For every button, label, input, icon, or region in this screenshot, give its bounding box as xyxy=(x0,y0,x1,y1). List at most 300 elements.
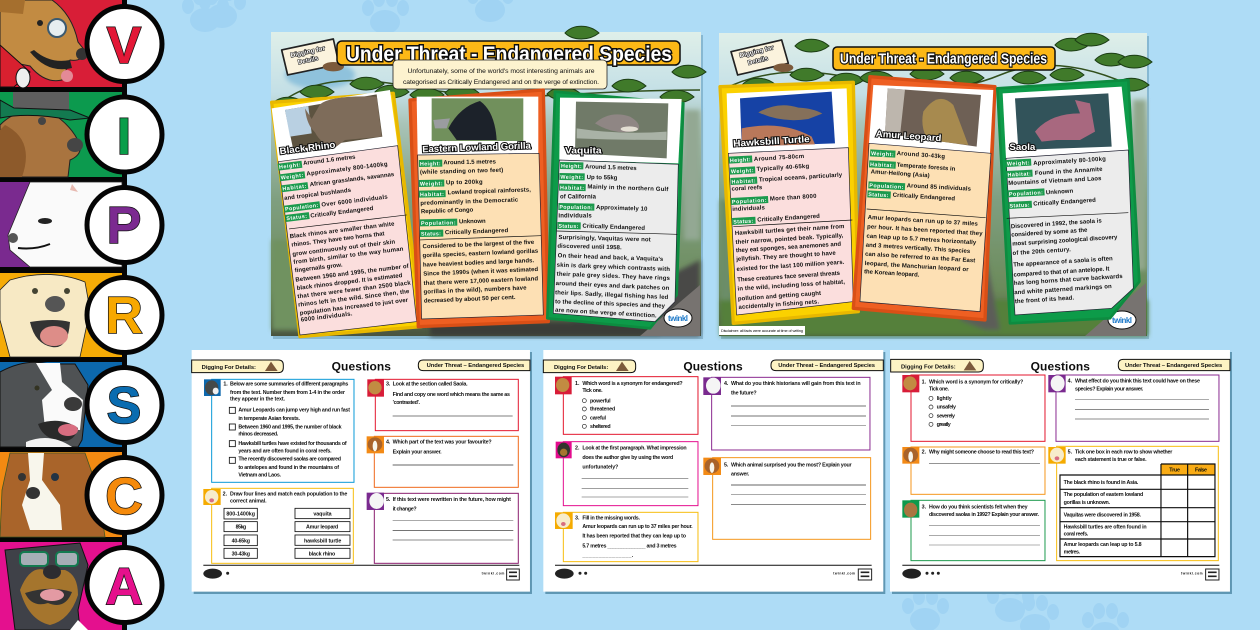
letter circle C xyxy=(87,458,162,532)
icon: airedale xyxy=(367,379,384,397)
question 4: 4. xyxy=(1068,378,1073,384)
worksheet 3 xyxy=(890,350,1232,594)
facts: saola: Habitat: xyxy=(1007,171,1031,179)
question 3: Fill in the missing words. xyxy=(582,515,641,521)
facts: rhino: Around 1.6 metres xyxy=(303,155,356,167)
question 1: years and are often found in coral reefs. xyxy=(238,448,332,454)
question 3: discovered saolas in 1992? Explain your answer. xyxy=(929,512,1040,518)
title banner xyxy=(833,47,1055,70)
paragraph: gorilla: that there were 17,000 eastern lowland xyxy=(423,276,539,287)
letter circle S: S xyxy=(107,377,141,435)
question 3 xyxy=(902,500,1045,561)
letter circle S xyxy=(87,368,162,442)
intro text box: Unfortunately, some of the world's most interesting animals are xyxy=(408,68,595,75)
VIPRSCA dog strip xyxy=(0,0,162,630)
paragraph: saola: compared to that of an antelope. It xyxy=(1013,266,1110,279)
question 2: 2. xyxy=(922,449,927,455)
paragraph: leopard: can also be referred to as the Far East xyxy=(865,252,975,264)
question 1: Amur Leopards can jump very high and run fast xyxy=(238,408,350,414)
question 5: true or false table: coral reefs. xyxy=(1064,532,1089,538)
question 3: 5.7 metres ______________ and 3 metres xyxy=(582,543,677,549)
facts: vaquita: Approximately 10 xyxy=(596,205,648,213)
panel: S blue dog xyxy=(0,362,122,447)
facts: gorilla: Unknown xyxy=(459,219,486,225)
question 5: true or false table: False xyxy=(1195,468,1207,474)
facts: turtle: Around 75-80cm xyxy=(754,154,804,163)
question 2: hawksbill turtle xyxy=(304,538,341,544)
facts: gorilla: Status: xyxy=(421,231,441,238)
badge: Digging for Details: Details xyxy=(297,55,319,66)
question 1: unsafely xyxy=(937,405,956,411)
question 4: Explain your answer. xyxy=(393,449,442,455)
card: Vaquita: Vaquita xyxy=(565,145,603,155)
card: Eastern Lowland Gorilla: Eastern Lowland Gorilla xyxy=(422,141,532,154)
facts: saola: Found in the Annamite xyxy=(1035,167,1103,177)
paragraph: vaquita: skin is dark grey which contrasts with xyxy=(557,263,670,273)
vines and leaves xyxy=(272,26,706,110)
facts: gorilla: Around 1.5 metres xyxy=(443,159,497,166)
worksheet 1 xyxy=(192,350,532,594)
question 1 xyxy=(902,375,1045,441)
facts: gorilla: predominantly in the Democratic xyxy=(420,198,519,207)
paragraph: vaquita: their lips. Sadly, illegal fishing has led xyxy=(555,290,669,301)
card: Hawksbill Turtle xyxy=(720,82,858,323)
question 2 xyxy=(556,442,698,506)
paragraph: saola xyxy=(1011,218,1124,305)
facts: gorilla: Population: xyxy=(421,220,456,227)
facts: gorilla xyxy=(419,159,541,240)
poster: left, black rhino, gorilla, vaquita xyxy=(271,26,706,339)
facts: leopard: Habitat: xyxy=(870,162,894,169)
facts: rhino: African grasslands, savannas xyxy=(310,172,395,188)
question 3 xyxy=(555,512,698,562)
card: Saola xyxy=(997,80,1139,323)
card: Saola: Saola xyxy=(1009,142,1036,152)
facts: leopard: Critically Endangered xyxy=(893,193,955,202)
paragraph: rhino: from birth, similar to the way human xyxy=(293,246,404,266)
panel: A pink dog xyxy=(0,542,122,630)
facts: leopard: Around 85 individuals xyxy=(907,183,972,193)
photo: rhino xyxy=(285,94,382,150)
copyright strip xyxy=(719,326,805,335)
facts: gorilla: Republic of Congo xyxy=(421,207,474,215)
paragraph: saola: Discovered in 1992, the saola is xyxy=(1011,218,1103,230)
question 1: from the text. Number them from 1-4 in the order xyxy=(230,390,345,396)
header tab xyxy=(192,360,283,373)
topic tab: Under Threat – Endangered Species xyxy=(778,363,875,369)
paragraph: vaquita: around their eyes and dark patches on xyxy=(556,281,670,292)
photo: gorilla xyxy=(432,98,523,141)
question 5: true or false table: Hawksbill turtles are often found in xyxy=(1064,524,1147,530)
paragraph: vaquita: discovered until 1958. xyxy=(557,244,622,251)
facts: rhino: Population: xyxy=(285,203,319,213)
header tab xyxy=(891,359,983,372)
letter circle A xyxy=(87,548,162,622)
question 1: 1. xyxy=(223,382,228,388)
panel: R yellow dog xyxy=(0,273,122,357)
paragraph: gorilla: have heaviest bodies and large hands. xyxy=(423,258,535,269)
facts: turtle: Critically Endangered xyxy=(757,214,820,224)
badge: Digging for Details xyxy=(282,39,344,75)
copyright strip: Disclaimer: all facts were accurate at time of writing xyxy=(721,328,803,333)
photo: vaquita xyxy=(575,102,668,158)
paragraph: rhino: Between 1960 and 1995, the number of xyxy=(295,264,409,284)
question 1 xyxy=(204,379,354,482)
paragraph: leopard: can leap up to 5.7 metres horizontally xyxy=(866,234,977,246)
paragraph: saola: The appearance of a saola is often xyxy=(1013,256,1113,269)
question 2: Look at the first paragraph. What impression xyxy=(582,445,687,451)
question 1: Hawksbill turtles have existed for thousands of xyxy=(238,441,347,447)
facts: saola xyxy=(1006,157,1128,218)
paragraph: rhino: grow continuously out of their skin xyxy=(292,239,396,258)
facts: leopard: Amur-Heilong (Asia) xyxy=(871,169,930,179)
card: Black Rhino xyxy=(272,90,422,337)
letter circle V xyxy=(87,6,162,82)
worksheet 2 xyxy=(543,350,885,594)
grey corner and twinkl logo: twinkl xyxy=(668,314,688,323)
facts: turtle: More than 8000 xyxy=(770,194,817,203)
badge: Digging for Details: Digging for xyxy=(290,45,326,59)
question 3 xyxy=(367,379,518,431)
question 5: 5. xyxy=(724,463,729,469)
paragraph: leopard: per hour. It has been reported that they xyxy=(867,224,983,237)
question 3: 3. xyxy=(386,382,391,388)
facts: gorilla: Critically Endangered xyxy=(445,228,509,236)
facts: rhino: Habitat: xyxy=(282,184,307,193)
paragraph: gorilla xyxy=(422,240,539,305)
letter circle C: C xyxy=(105,468,143,526)
paragraph: turtle: accidentally in fishing nets. xyxy=(738,299,820,311)
question 1: Tick one. xyxy=(582,388,603,394)
paragraph: gorilla: decreased by about 50 per cent. xyxy=(424,295,516,305)
facts: turtle: Typically 40-65kg xyxy=(756,164,810,173)
question 5: answer. xyxy=(731,471,750,477)
facts: vaquita: individuals xyxy=(558,214,592,220)
facts: leopard xyxy=(867,149,986,218)
panel: I green dog xyxy=(0,92,122,177)
question 1: threatened xyxy=(590,407,615,413)
question 2: 30-43kg xyxy=(232,551,250,557)
icon: retriever xyxy=(1048,447,1066,464)
grey corner and twinkl logo: twinkl xyxy=(1112,316,1132,325)
question 4: the future? xyxy=(731,391,757,397)
question 5: true or false table: Tick one box in each row to show whether xyxy=(1075,449,1172,455)
paragraph: leopard: and 3 metres vertically. This species xyxy=(866,243,971,255)
question 2: does the author give by using the word xyxy=(582,455,673,461)
question 1: 1. xyxy=(575,381,580,387)
paragraph: gorilla: gorilla species, eastern lowland gorillas xyxy=(422,249,539,259)
question 1: to antelopes and found in the mountains of xyxy=(238,465,339,471)
facts: vaquita: Height: xyxy=(561,164,582,170)
paragraph: gorilla: gorillas in the wild), numbers have xyxy=(423,285,527,296)
icon: collie xyxy=(204,379,221,396)
facts: vaquita: Habitat: xyxy=(560,185,584,192)
paragraph: turtle: in the wild, including loss of habitat, xyxy=(737,279,846,293)
icon: white dog xyxy=(1048,375,1066,392)
question 2: Draw four lines and match each population to the xyxy=(230,492,347,498)
paragraph: leopard: leopard, the Manchurian leopard or xyxy=(865,261,969,273)
facts: vaquita: Weight: xyxy=(560,175,583,181)
facts: saola: Unknown xyxy=(1046,189,1074,196)
paragraph: saola: considered by some as the xyxy=(1011,228,1088,239)
vines and leaves xyxy=(720,33,1152,98)
question 5: true or false table: Amur leopards can leap up to 5.8 xyxy=(1064,542,1142,548)
photo: turtle xyxy=(740,92,835,147)
facts: rhino: Status: xyxy=(286,214,308,222)
topic tab: Under Threat – Endangered Species xyxy=(427,363,524,369)
facts: turtle: Population: xyxy=(732,198,767,206)
question 2: 2. xyxy=(575,445,580,451)
question 1: sheltered xyxy=(590,424,611,430)
paragraph: turtle xyxy=(735,224,846,311)
facts: rhino: Approximately 800-1400kg xyxy=(306,162,388,178)
title banner: Under Threat - Endangered Species xyxy=(346,43,672,66)
question 5: true or false table xyxy=(1048,446,1218,561)
question 4: What effect do you think this text could have on these xyxy=(1075,378,1200,384)
question 2: 85kg xyxy=(236,525,246,531)
question 1: 1. xyxy=(922,379,927,385)
question 5: true or false table: gorillas is unknown. xyxy=(1064,500,1110,506)
facts: vaquita xyxy=(557,162,677,234)
question 5: true or false table: metres. xyxy=(1064,549,1080,555)
question 4 xyxy=(367,436,518,487)
facts: leopard: Status: xyxy=(868,192,889,199)
question 5 xyxy=(367,493,518,563)
paragraph: vaquita: Surprisingly, Vaquitas were not xyxy=(558,235,651,243)
paragraph: leopard: the Korean leopard. xyxy=(864,269,920,279)
topic tab xyxy=(771,360,883,371)
question 4 xyxy=(1048,375,1219,441)
question 5: true or false table: True xyxy=(1169,468,1180,474)
facts: vaquita: Status: xyxy=(558,224,579,230)
question 4: What do you think historians will gain from this text in xyxy=(731,381,861,387)
question 2: unfortunately? xyxy=(582,465,618,471)
question 1 xyxy=(555,377,698,434)
heading: Questions xyxy=(1031,359,1090,373)
letter circle I: I xyxy=(117,108,131,166)
question 3: _______________. xyxy=(581,553,634,559)
question 3: 3. xyxy=(575,515,580,521)
paragraph: saola: most surprising zoological discovery xyxy=(1012,235,1118,248)
question 1: greatly xyxy=(937,422,951,428)
facts: gorilla: Up to 200kg xyxy=(446,180,483,186)
facts: vaquita: Population: xyxy=(559,205,593,211)
question 3: 'contrasted'. xyxy=(393,400,420,406)
paragraph: gorilla: Considered to be the largest of the five xyxy=(422,240,535,250)
facts: saola: Mountains of Vietnam and Laos xyxy=(1008,176,1102,187)
icon: airedale xyxy=(555,377,572,394)
question 4: 4. xyxy=(724,381,729,387)
card: Amur Leopard: Amur Leopard xyxy=(876,129,942,143)
footer xyxy=(555,565,872,580)
facts: vaquita: Up to 55kg xyxy=(587,175,618,182)
question 1: Which word is a synonym for critically? xyxy=(929,379,1023,385)
paragraph: vaquita xyxy=(555,235,671,320)
facts: gorilla: Habitat: xyxy=(420,192,444,198)
icon: spaniel xyxy=(703,458,721,475)
question 1: severely xyxy=(937,413,955,419)
icon: spaniel xyxy=(902,447,919,464)
card: Vaquita xyxy=(547,92,683,328)
facts: leopard: Weight: xyxy=(871,151,894,158)
paragraph: rhino: that there were fewer than 2500 black xyxy=(297,280,412,300)
grey corner and twinkl logo xyxy=(640,285,700,336)
question 3: Find and copy one word which means the same as xyxy=(393,392,510,398)
question 1: lightly xyxy=(937,396,952,402)
paragraph: turtle: Hawksbill turtles get their name from xyxy=(735,224,845,237)
paragraph: vaquita: to the decline of this species and they xyxy=(555,299,666,310)
header tab: Digging For Details: xyxy=(202,365,256,371)
question 1: The recently discovered saolas are compared xyxy=(238,457,341,463)
paragraph: saola: and white patterned markings on xyxy=(1014,284,1112,296)
paragraph: turtle: jellyfish. They are thought to have xyxy=(735,251,837,263)
question 1: Between 1960 and 1995, the number of black xyxy=(238,424,342,430)
title banner: Under Threat - Endangered Species xyxy=(840,52,1047,68)
photo: leopard xyxy=(885,88,981,147)
question 2: 2. xyxy=(223,492,228,498)
card: Black Rhino: Black Rhino xyxy=(279,140,336,156)
question 1: Below are some summaries of different paragraphs xyxy=(230,382,348,388)
letter circle A: A xyxy=(105,558,143,616)
panel: C orange dog xyxy=(0,452,122,537)
letter circle P xyxy=(87,188,162,262)
topic tab xyxy=(418,360,530,371)
question 5: true or false table: The population of eastern lowland xyxy=(1064,492,1143,498)
question 4: species? Explain your answer. xyxy=(1075,386,1144,392)
facts: rhino xyxy=(278,155,407,229)
question 2: Why might someone choose to read this text? xyxy=(929,449,1034,455)
icon: spaniel xyxy=(367,436,384,453)
facts: vaquita: of California xyxy=(560,194,597,200)
footer: twinkl.com xyxy=(833,571,855,575)
question 2: 40-65kg xyxy=(232,538,250,544)
paragraph: saola: the front of its head. xyxy=(1015,295,1075,305)
facts: vaquita: Around 1.5 metres xyxy=(585,164,637,172)
facts: turtle: Weight: xyxy=(731,168,754,175)
footer xyxy=(902,565,1219,580)
question 5: it change? xyxy=(393,507,417,513)
question 1: rhinos decreased. xyxy=(238,432,279,438)
badge: Digging for Details xyxy=(731,40,793,75)
facts: turtle: coral reefs xyxy=(731,185,763,193)
question 2: Amur leopard xyxy=(306,525,338,531)
footer: twinkl.com xyxy=(482,571,504,575)
paragraph: turtle: they eat sponges, sea anemones and xyxy=(736,242,842,254)
header tab: Digging For Details: xyxy=(554,365,608,371)
question 2: vaquita xyxy=(313,512,332,518)
question 5: true or false table: 5. xyxy=(1068,449,1073,455)
photo: saola xyxy=(1015,93,1112,150)
facts: rhino: Over 6000 individuals xyxy=(321,194,389,209)
topic tab xyxy=(1118,359,1230,371)
question 5: 5. xyxy=(386,497,391,503)
question 3: 3. xyxy=(922,504,927,510)
paragraph: vaquita: On their head and back, a Vaquita's xyxy=(558,253,664,263)
facts: vaquita: Mainly in the northern Gulf xyxy=(587,184,668,193)
facts: rhino: Critically Endangered xyxy=(310,206,374,220)
question 2: black rhino xyxy=(309,551,336,557)
topic tab: Under Threat – Endangered Species xyxy=(1125,363,1222,369)
panel: P purple dog xyxy=(0,182,122,267)
icon: retriever xyxy=(555,512,573,529)
paragraph: rhino: rhinos left in the wild. Since then, the xyxy=(298,289,410,309)
question 2 xyxy=(902,447,1045,494)
letter circle P: P xyxy=(107,197,141,255)
footer: twinkl.com xyxy=(1181,571,1203,575)
letter circle I xyxy=(87,97,162,172)
facts: vaquita: Critically Endangered xyxy=(582,224,645,232)
facts: rhino: and tropical bushlands xyxy=(284,188,352,202)
facts: turtle: Status: xyxy=(733,219,754,226)
question 1: they appear in the text. xyxy=(230,397,286,403)
question 4: Which part of the text was your favourite? xyxy=(393,439,492,445)
question 1: careful xyxy=(590,415,607,421)
paragraph: vaquita: are now on the verge of extinction. xyxy=(555,308,657,320)
paragraph: saola: has long horns that curve backwards xyxy=(1014,274,1124,287)
facts: leopard: Temperate forests in xyxy=(897,163,956,173)
question 2 xyxy=(203,488,353,563)
question 1: in temperate Asian forests. xyxy=(238,416,301,422)
facts: rhino: Weight: xyxy=(281,173,304,182)
facts: saola: Population: xyxy=(1009,190,1043,198)
intro text box xyxy=(393,60,607,89)
icon: rottweiler xyxy=(556,442,572,458)
paragraph: leopard xyxy=(864,215,983,279)
facts: saola: Status: xyxy=(1009,203,1030,210)
header tab: Digging For Details: xyxy=(901,364,956,370)
question 3: How do you think scientists felt when they xyxy=(929,504,1028,510)
footer xyxy=(203,565,519,580)
question 5: true or false table: The black rhino is found in Asia. xyxy=(1064,480,1139,486)
icon: hound xyxy=(902,500,919,518)
facts: gorilla: Lowland tropical rainforests, xyxy=(448,187,531,196)
facts: turtle: Tropical oceans, particularly xyxy=(759,173,843,184)
facts: gorilla: (while standing on two feet) xyxy=(420,168,503,176)
icon: white dog xyxy=(367,493,384,510)
paragraph: rhino: population has increased to just over xyxy=(300,298,409,317)
facts: saola: Weight: xyxy=(1007,160,1030,168)
question 1: Which word is a synonym for endangered? xyxy=(582,381,683,387)
letter circle R xyxy=(87,278,162,352)
icon: retriever xyxy=(203,489,221,505)
paragraph: rhino: black rhinos dropped. It is estimated xyxy=(297,273,403,292)
letter circle R: R xyxy=(105,287,143,345)
question 5: true or false table: each statement is true or false. xyxy=(1075,457,1147,463)
paragraph: gorilla: Since the 1990s (when it was estimated xyxy=(423,267,539,278)
facts: turtle: Habitat: xyxy=(731,178,756,186)
paragraph: turtle: existed for the last 100 million years. xyxy=(736,260,845,273)
paragraph: turtle: pollution and getting caught xyxy=(738,291,821,303)
question 5: If this text were rewritten in the future, how might xyxy=(393,497,511,503)
question 3: Amur leopards can run up to 37 miles per hour. xyxy=(582,524,693,530)
paragraph: rhino xyxy=(290,221,412,324)
facts: turtle xyxy=(729,154,852,227)
paragraph: rhino: rhinos. They have two horns that xyxy=(291,231,385,249)
question 5: Which animal surprised you the most? Explain your xyxy=(731,463,852,469)
question 2: correct animal. xyxy=(230,499,267,505)
icon: airedale xyxy=(902,375,919,392)
paragraph: turtle: These creatures face several threats xyxy=(737,271,841,284)
letter circle V: V xyxy=(107,17,142,75)
question 4 xyxy=(703,377,870,450)
grey corner and twinkl logo xyxy=(1085,283,1146,336)
paragraph: vaquita: their pale grey sides. They have rings xyxy=(557,272,671,282)
question 3: It has been reported that they can leap up to xyxy=(582,534,687,540)
facts: gorilla: Height: xyxy=(420,161,441,168)
facts: saola: Critically Endangered xyxy=(1033,198,1096,208)
question 5: true or false table: Vaquitas were discovered in 1958. xyxy=(1064,512,1141,518)
header tab xyxy=(543,360,636,373)
